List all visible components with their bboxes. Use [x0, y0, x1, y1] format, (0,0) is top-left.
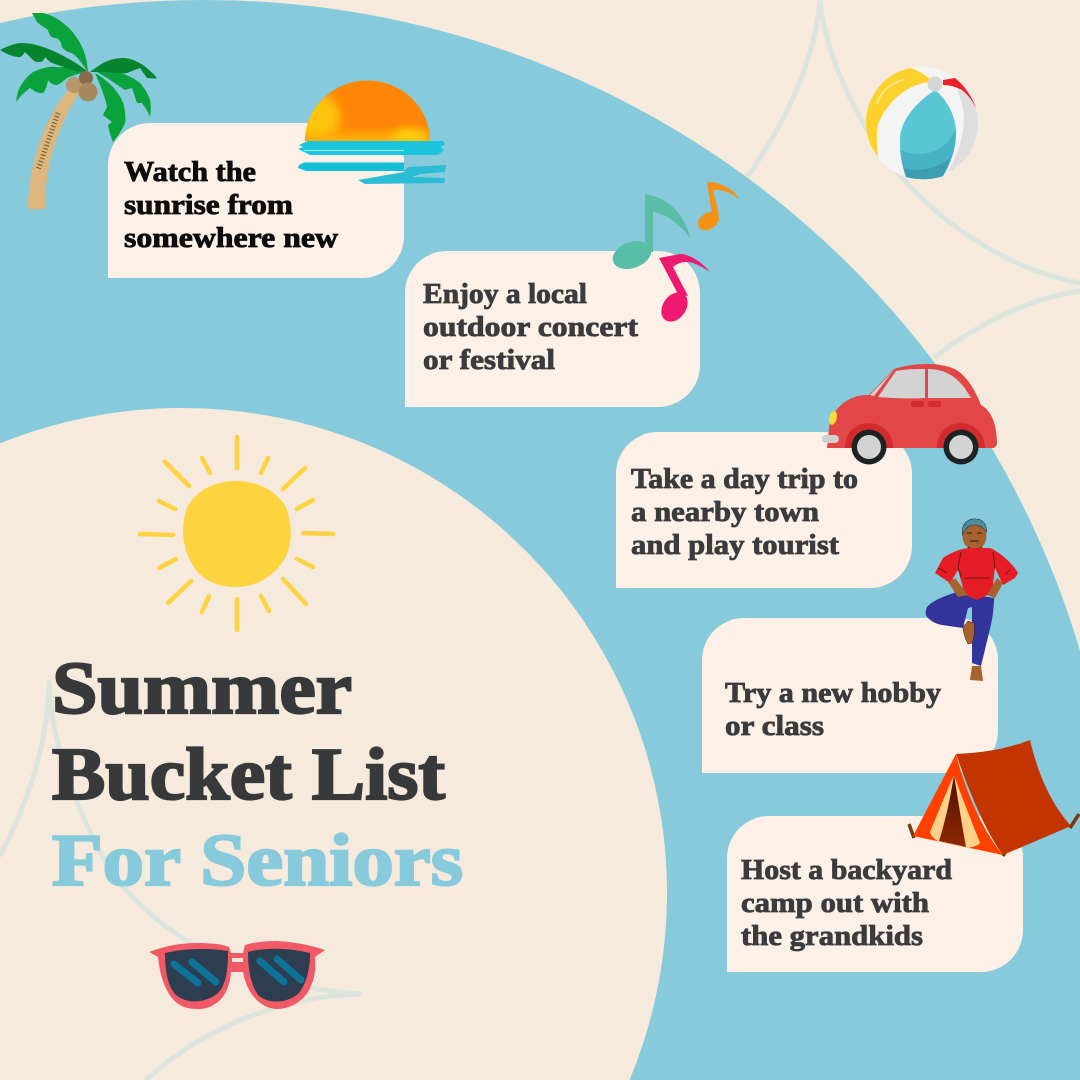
- text: card 2: outdoor concert: [423, 312, 639, 343]
- text: card 5: camp out with: [741, 888, 929, 919]
- text: card 4: or class: [725, 711, 824, 742]
- text: card 1: sunrise from: [124, 190, 293, 221]
- icon: woman in tree pose: [926, 519, 1018, 681]
- title: Summer: [52, 648, 352, 730]
- icon: orange tent: [909, 740, 1079, 856]
- text: card 3: [631, 464, 858, 561]
- panel: take a day trip: [616, 432, 912, 588]
- icon: red car: [822, 364, 997, 464]
- panel: host a backyard camp out: [727, 816, 1023, 972]
- icon: sunrise over water: [296, 80, 446, 184]
- text: card 2: Enjoy a local: [423, 279, 587, 310]
- text: card 2: or festival: [423, 345, 555, 376]
- beige circle: [0, 408, 667, 1080]
- text: card 5: Host a backyard: [741, 855, 952, 886]
- text: card 3: and play tourist: [631, 530, 840, 561]
- text: card 3: Take a day trip to: [631, 464, 858, 495]
- title: For Seniors: [52, 820, 463, 902]
- text: card 4: [725, 678, 941, 742]
- decorative arcs: bottom left: [0, 682, 360, 1080]
- text: card 1: [124, 157, 339, 254]
- text: card 3: a nearby town: [631, 497, 819, 528]
- decorative arcs: top right: [745, 0, 1080, 358]
- panel: watch the sunrise: [108, 123, 404, 278]
- icon: sun: [140, 437, 333, 630]
- icon: beach ball: [866, 67, 978, 179]
- icon: palm tree: [0, 13, 157, 209]
- text: card 1: Watch the: [124, 157, 256, 188]
- text: card 2: [423, 279, 639, 376]
- panel: enjoy a local concert: [405, 251, 700, 407]
- panel: try a new hobby: [702, 618, 998, 773]
- text: card 1: somewhere new: [124, 223, 339, 254]
- text: card 4: Try a new hobby: [725, 678, 941, 709]
- title: [52, 648, 463, 902]
- text: card 5: the grandkids: [741, 921, 923, 952]
- icon: music notes: [609, 182, 740, 327]
- text: card 5: [741, 855, 952, 952]
- title: Bucket List: [52, 734, 445, 816]
- icon: sunglasses: [149, 941, 325, 1009]
